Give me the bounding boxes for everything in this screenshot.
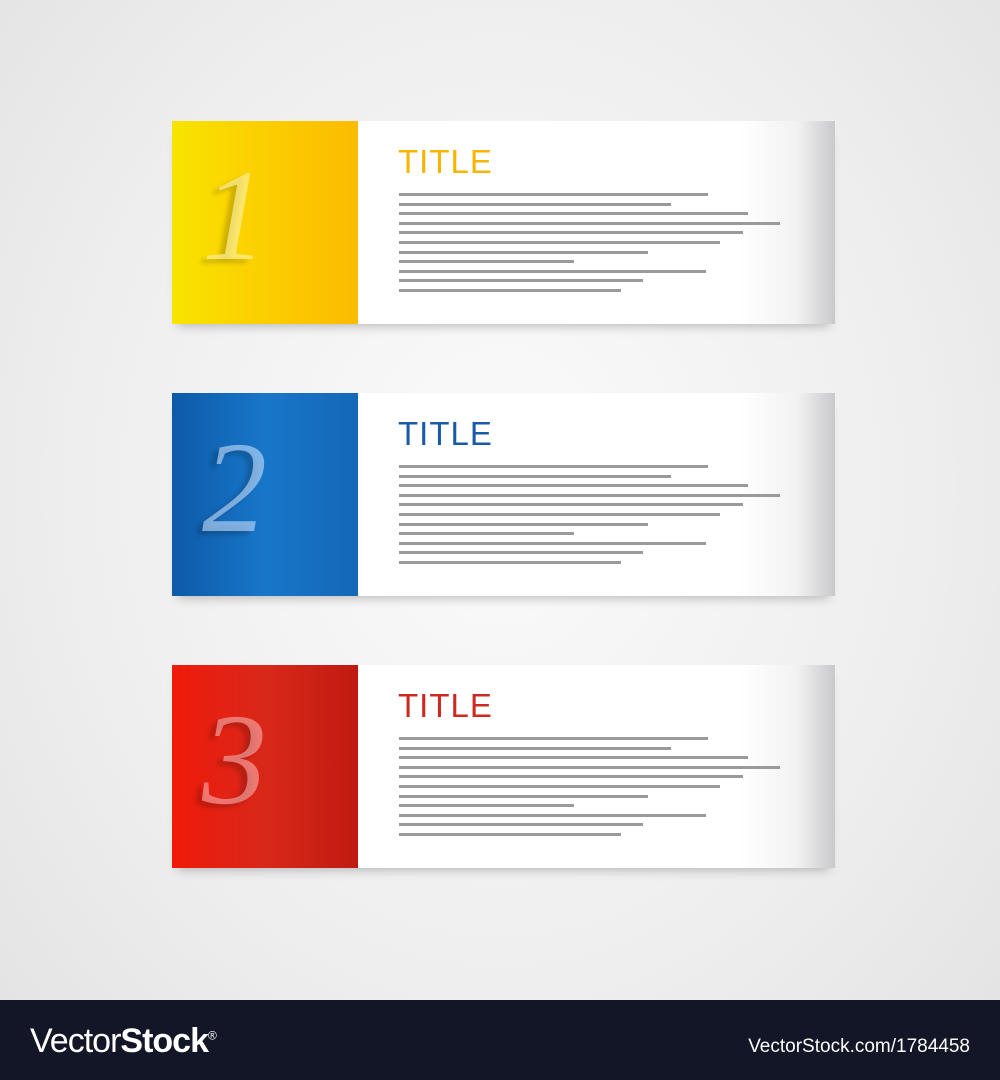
color block 2: 2 bbox=[202, 416, 267, 560]
text block 3 bbox=[358, 665, 835, 868]
text block 1 bbox=[358, 121, 835, 324]
color block 2 bbox=[172, 393, 358, 596]
text block 2 bbox=[358, 393, 835, 596]
color block 1 bbox=[172, 121, 358, 324]
text block 1: TITLE bbox=[398, 143, 493, 180]
panel: step 2 bbox=[172, 393, 835, 596]
panel: step 1 bbox=[172, 121, 835, 324]
text block 3: TITLE bbox=[398, 687, 493, 724]
panel: step 3 bbox=[172, 665, 835, 868]
color block 1: 1 bbox=[202, 144, 267, 288]
color block 3 bbox=[172, 665, 358, 868]
url: VectorStock.com/1784458 bbox=[748, 1036, 970, 1057]
color block 3: 3 bbox=[202, 688, 267, 832]
footer bbox=[0, 1000, 1000, 1080]
text block 2: TITLE bbox=[398, 415, 493, 452]
logo: VectorStock® bbox=[30, 1022, 216, 1060]
